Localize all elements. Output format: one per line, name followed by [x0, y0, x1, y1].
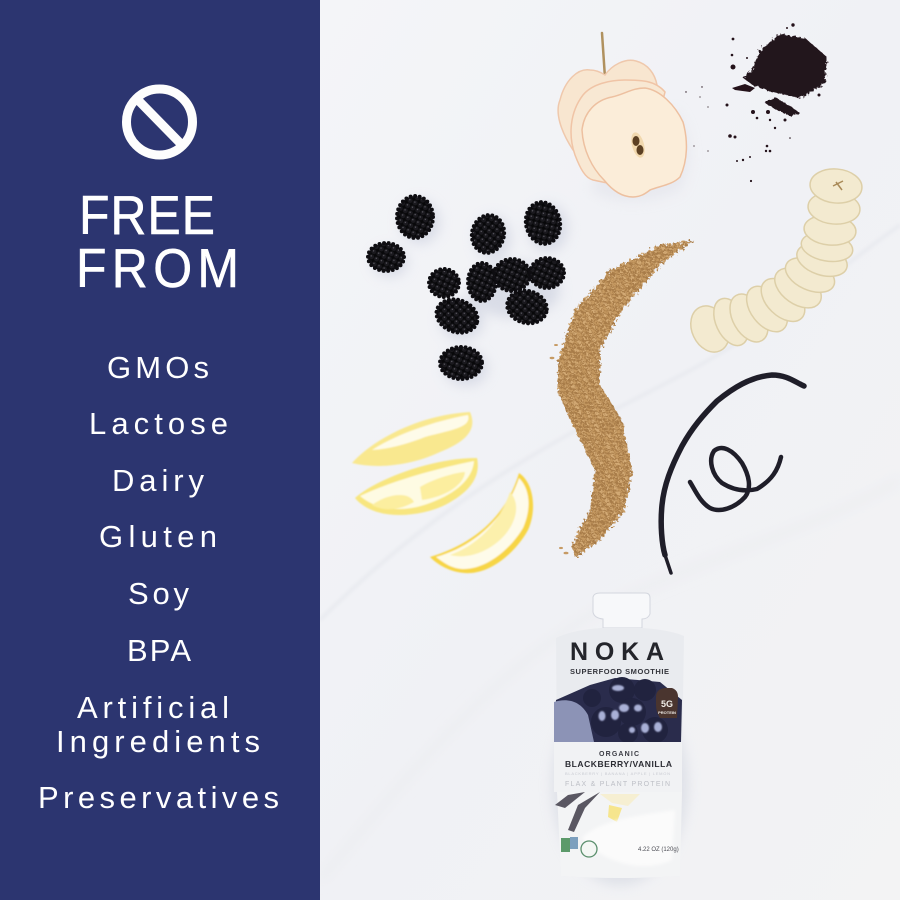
heading: free from — [76, 185, 239, 300]
blackberry photo — [554, 677, 682, 743]
product type: SUPERFOOD SMOOTHIE — [570, 667, 669, 676]
product pouch: BLACKBERRY/VANILLA — [565, 759, 672, 769]
list of excluded ingredients: Soy — [128, 576, 190, 611]
panel: free from — [0, 0, 320, 900]
product pouch: PROTEIN — [658, 710, 676, 715]
list of excluded ingredients — [38, 350, 279, 815]
pouch cap — [593, 593, 650, 628]
product pouch: BLACKBERRY | BANANA | APPLE | LEMON — [565, 771, 670, 776]
product pouch — [552, 593, 688, 885]
list of excluded ingredients: Dairy — [112, 463, 204, 498]
pouch body — [556, 628, 684, 878]
icon: prohibition sign — [126, 89, 192, 155]
berry shadows — [372, 200, 568, 386]
banana slices — [684, 167, 863, 358]
flax seeds — [550, 240, 695, 558]
list of excluded ingredients: Preservatives — [38, 780, 279, 815]
protein badge — [656, 688, 678, 718]
product pouch: FLAX & PLANT PROTEIN — [565, 781, 670, 788]
heading: free from: FROM — [76, 238, 239, 300]
product pouch: ORGANIC — [599, 751, 639, 758]
heading: free from: FREE — [79, 185, 215, 247]
list of excluded ingredients: Lactose — [89, 406, 228, 441]
apple slices — [558, 33, 689, 201]
lemon wedges — [352, 412, 533, 573]
certification logos — [561, 837, 597, 857]
vanilla beans — [661, 375, 804, 573]
blackberries — [368, 196, 568, 386]
brand name: NOKA — [570, 638, 664, 666]
acai powder — [685, 23, 827, 182]
net weight: 4.22 OZ (120g) — [638, 847, 679, 853]
berry cluster — [368, 196, 564, 379]
list of excluded ingredients: Ingredients — [56, 724, 260, 759]
flavour label — [554, 742, 682, 792]
vanilla flower image — [555, 792, 682, 878]
list of excluded ingredients: Gluten — [99, 519, 217, 554]
list of excluded ingredients: Artificial — [77, 690, 229, 725]
product pouch: 5G — [661, 699, 673, 709]
list of excluded ingredients: GMOs — [107, 350, 209, 385]
marble background — [320, 0, 900, 900]
list of excluded ingredients: BPA — [127, 633, 191, 668]
